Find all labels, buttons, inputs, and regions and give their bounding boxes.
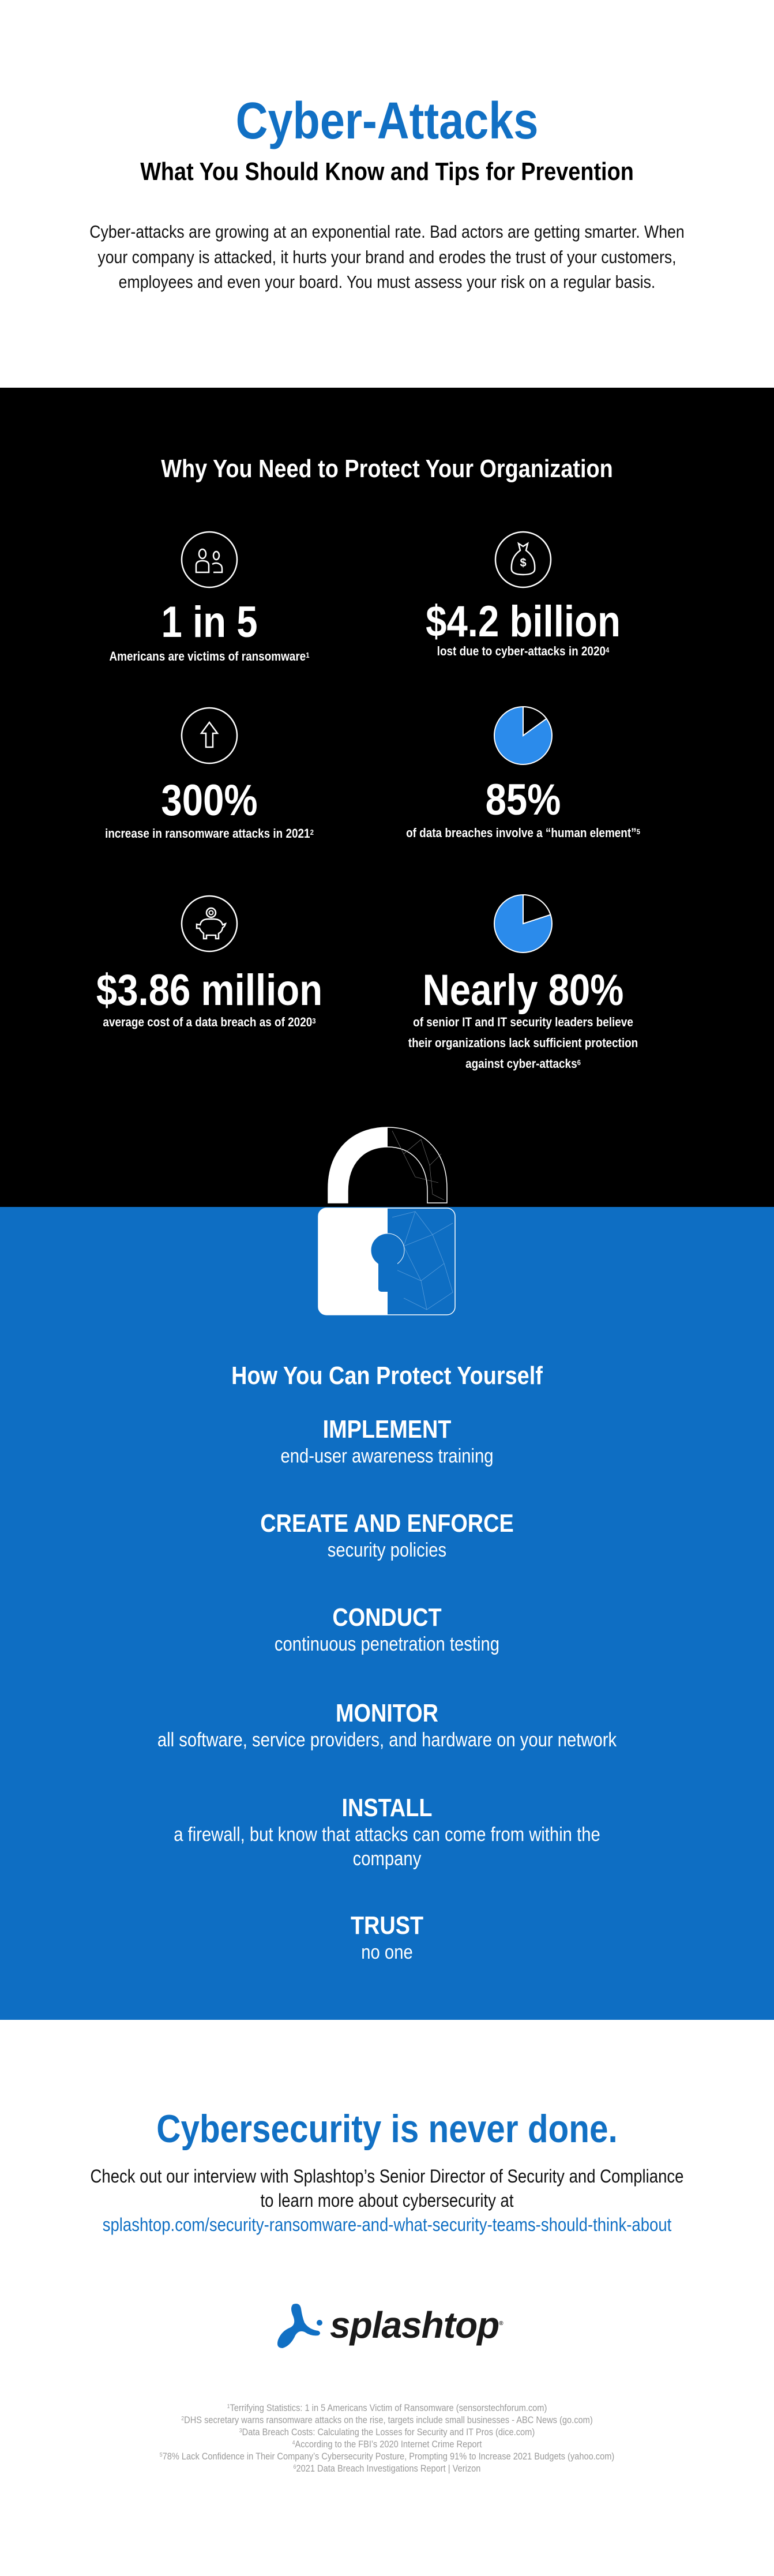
intro paragraph: Cyber-attacks are growing at an exponential rate. Bad actors are getting smarter. When [89,222,685,242]
tip: implement: IMPLEMENT [323,1415,451,1443]
title: Cyber-Attacks [236,92,538,150]
closing heading: Cybersecurity is never done. [156,2107,618,2151]
tip: monitor [157,1699,617,1751]
subtitle: What You Should Know and Tips for Prevention [140,158,634,186]
tip: implement: end-user awareness training [281,1445,493,1467]
stat: nearly 80%: their organizations lack sufficient protection [408,1036,638,1050]
pie chart: 85% [494,706,553,765]
intro paragraph [89,222,685,292]
intro paragraph: employees and even your board. You must assess your risk on a regular basis. [119,272,655,292]
tip: implement [281,1415,493,1467]
closing text [91,2166,683,2235]
footnotes: 4According to the FBI’s 2020 Internet Crime Report [292,2439,482,2450]
icon: padlock [318,1127,456,1315]
tip: trust: no one [361,1941,413,1963]
tip: trust [351,1911,423,1963]
icon: up arrow [181,707,238,764]
tip: conduct [275,1603,499,1655]
icon: money bag [495,531,551,588]
stat: nearly 80% [408,966,638,1071]
tip: install: company [353,1848,421,1870]
icon: money bag: $ [520,557,527,569]
footnotes: 2DHS secretary warns ransomware attacks on the rise, targets include small businesses - ABC News (go.com) [181,2414,593,2425]
tip: conduct: CONDUCT [332,1603,442,1632]
stat: 300%: 300% [161,776,258,825]
tip: install [174,1794,600,1870]
intro paragraph: your company is attacked, it hurts your brand and erodes the trust of your customers, [97,247,677,267]
stat: 300% [105,776,314,841]
footnotes: 3Data Breach Costs: Calculating the Losses for Security and IT Pros (dice.com) [239,2427,535,2438]
pie chart: 80% [494,894,553,953]
tip: monitor: all software, service providers, and hardware on your network [157,1729,617,1751]
stat: 1 in 5: 1 in 5 [161,598,258,647]
heading: how to protect: How You Can Protect Yourself [231,1362,543,1390]
tip: install: INSTALL [342,1794,432,1822]
stat: 4.2 billion: $4.2 billion [426,597,621,646]
tip: install: a firewall, but know that attacks can come from within the [174,1824,600,1846]
icon: splash [277,2304,322,2348]
heading: why protect: Why You Need to Protect Your Organization [161,455,613,483]
logo: splashtop: splashtop® [330,2304,503,2346]
stat: 85%: 85% [486,775,561,824]
stat: nearly 80%: Nearly 80% [423,966,623,1015]
stat: 3.86 million: $3.86 million [96,966,322,1015]
tip: monitor: MONITOR [336,1699,438,1727]
stat: 1 in 5 [109,598,310,663]
icon: people [181,531,238,588]
footnotes: 578% Lack Confidence in Their Company’s Cybersecurity Posture, Prompting 91% to Increase 2021 Budgets (yahoo.com) [160,2451,614,2462]
icon: piggy bank [181,895,238,952]
stat: 85% [406,775,640,840]
stat: nearly 80%: against cyber-attacks6 [465,1056,581,1071]
footnotes [160,2402,614,2474]
tip: create and enforce: CREATE AND ENFORCE [260,1509,514,1538]
stat: 300%: increase in ransomware attacks in 20212 [105,826,314,841]
tip: create and enforce: security policies [328,1539,446,1561]
stat: 3.86 million: average cost of a data breach as of 20203 [103,1015,316,1029]
closing text: splashtop.com/security-ransomware-and-what-security-teams-should-think-about [103,2214,671,2235]
closing text: to learn more about cybersecurity at [260,2190,514,2211]
footnotes: 1Terrifying Statistics: 1 in 5 Americans Victim of Ransomware (sensorstechforum.com) [227,2402,547,2413]
footnotes: 62021 Data Breach Investigations Report | Verizon [294,2463,480,2474]
stat: 1 in 5: Americans are victims of ransomware1 [109,649,310,663]
tip: conduct: continuous penetration testing [275,1633,499,1655]
stat: nearly 80%: of senior IT and IT security leaders believe [413,1015,633,1029]
tip: trust: TRUST [351,1911,423,1940]
closing text: Check out our interview with Splashtop’s Senior Director of Security and Compliance [91,2166,683,2187]
stat: 4.2 billion: lost due to cyber-attacks in 20204 [437,644,609,658]
panel: how to protect (blue) [0,1207,774,2020]
tip: create and enforce [260,1509,514,1561]
panel: why protect (black) [0,388,774,1207]
stat: 85%: of data breaches involve a “human element”5 [406,826,640,840]
